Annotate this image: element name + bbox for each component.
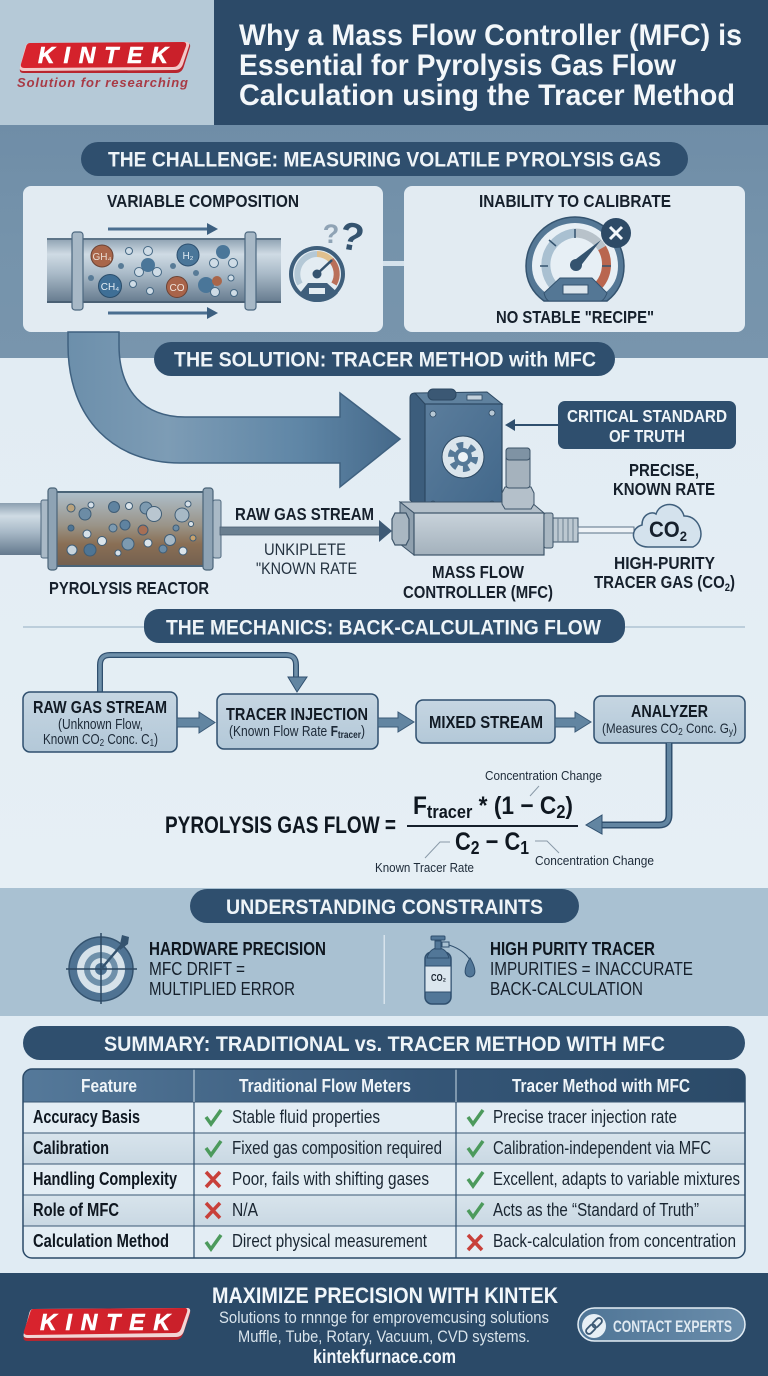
heading: the solution: [154, 342, 615, 376]
logo: Kintek: KINTEK: [38, 42, 169, 68]
box: tracer injection: tracer: [338, 730, 361, 741]
heading: the mechanics: THE MECHANICS: BACK-CALCULATING FLOW: [166, 616, 602, 640]
box: raw gas stream: Known CO: [43, 732, 113, 748]
constraint: high purity tracer: HIGH PURITY TRACER: [490, 938, 655, 959]
box: raw gas stream: Conc. C: [104, 732, 150, 748]
formula: [165, 792, 578, 858]
constraint: high purity tracer: [425, 936, 693, 1004]
label: high-purity tracer gas: [594, 553, 735, 594]
box: raw gas stream: ): [154, 732, 158, 748]
formula: 1: [520, 838, 529, 858]
icon: pipe with gas molecules: [47, 223, 281, 319]
label: mass flow controller: [403, 562, 553, 602]
box: analyzer: 2: [678, 727, 683, 738]
heading: understanding constraints: UNDERSTANDING CONSTRAINTS: [226, 895, 543, 919]
icon: gas cylinder with drop: [425, 936, 475, 1004]
label: mass flow controller: MASS FLOW: [432, 562, 524, 582]
table header: Tracer Method with MFC: [512, 1076, 690, 1096]
arrow: raw gas stream: [220, 504, 392, 578]
box: tracer injection: ): [361, 724, 365, 740]
callout: critical standard of truth: CRITICAL STANDARD: [567, 406, 727, 426]
formula: F: [413, 792, 428, 820]
heading: the challenge: [81, 142, 688, 176]
box: tracer injection: (Known Flow Rate F: [229, 724, 347, 740]
heading: the mechanics: [144, 609, 625, 643]
constraint: hardware precision: MULTIPLIED ERROR: [149, 978, 295, 999]
footer: [0, 1273, 768, 1376]
title: Calculation using the Tracer Method: [239, 79, 735, 112]
constraint: high purity tracer: IMPURITIES = INACCURATE: [490, 958, 693, 979]
tracer gas line and CO2 cloud: 2: [680, 528, 687, 544]
label: precise known rate: KNOWN RATE: [613, 479, 715, 499]
formula: tracer: [427, 802, 472, 822]
row: accuracy basis: Accuracy Basis: [33, 1107, 140, 1127]
pyrolysis reactor: PYROLYSIS REACTOR: [49, 578, 209, 598]
row: calibration: Calibration: [33, 1138, 109, 1158]
logo: footer Kintek: [24, 1308, 190, 1341]
arrow: to analyzer: [555, 712, 591, 732]
box: analyzer: y: [729, 727, 733, 738]
icon: pipe with gas molecules: H₂: [182, 251, 194, 262]
row: accuracy basis: Stable fluid properties: [232, 1107, 380, 1127]
formula: PYROLYSIS GAS FLOW =: [165, 812, 396, 839]
panel: inability to calibrate: NO STABLE "RECIPE": [496, 307, 654, 327]
divider: [23, 626, 745, 628]
icon: pipe with gas molecules: CH₄: [101, 282, 119, 293]
row: calibration: [33, 1138, 711, 1158]
heading: understanding constraints: [190, 889, 579, 923]
box: raw gas stream: 2: [100, 738, 104, 749]
formula: 2: [556, 802, 565, 822]
box: raw gas stream: [23, 692, 177, 752]
box: tracer injection: [217, 694, 378, 749]
button: contact experts: [578, 1308, 745, 1341]
formula: ): [565, 792, 573, 820]
title: Essential for Pyrolysis Gas Flow: [239, 49, 677, 82]
formula: * (1 − C: [472, 792, 556, 820]
row: calibration: Calibration-independent via MFC: [493, 1138, 711, 1158]
arrow: to tracer injection: [177, 712, 215, 733]
heading: summary: [23, 1026, 745, 1060]
footer text: MAXIMIZE PRECISION WITH KINTEK: [212, 1283, 559, 1308]
icon: large gauge with x badge: [526, 217, 631, 301]
title: Why a Mass Flow Controller (MFC) is: [239, 19, 742, 52]
box: mixed stream: MIXED STREAM: [429, 712, 543, 732]
heading: the challenge: THE CHALLENGE: MEASURING VOLATILE PYROLYSIS GAS: [108, 148, 661, 172]
icon: small gauge with question marks: ?: [336, 214, 367, 261]
constraint: hardware precision: HARDWARE PRECISION: [149, 938, 326, 959]
formula: C: [455, 828, 473, 856]
icon: gas cylinder with drop: CO₂: [431, 973, 446, 984]
icon: target with dart: [66, 933, 137, 1004]
callout: critical standard of truth: [505, 401, 736, 449]
row: calculation method: Calculation Method: [33, 1231, 169, 1251]
box: tracer injection: TRACER INJECTION: [226, 704, 368, 724]
icon: small gauge with question marks: ?: [323, 219, 339, 249]
panel: inability to calibrate: [404, 186, 745, 332]
formula annotations: Known Tracer Rate: [375, 860, 474, 875]
label: precise known rate: [613, 460, 715, 499]
table header: Feature: [81, 1076, 137, 1096]
formula annotations: Concentration Change: [485, 768, 602, 783]
divider: [384, 935, 385, 1004]
label: high-purity tracer gas: ): [730, 572, 735, 592]
formula annotations: Concentration Change: [535, 853, 654, 868]
label: high-purity tracer gas: HIGH-PURITY: [614, 553, 715, 573]
tracer gas line and CO2 cloud: CO: [649, 517, 682, 542]
arrow: raw gas to tracer injection: [100, 655, 307, 692]
footer text: Muffle, Tube, Rotary, Vacuum, CVD systems.: [238, 1328, 530, 1346]
icon: pipe with gas molecules: GH₄: [92, 252, 112, 263]
arrow: raw gas stream: "KNOWN RATE: [256, 559, 357, 578]
panel: variable composition: VARIABLE COMPOSITION: [107, 191, 299, 211]
pyrolysis reactor: [0, 488, 221, 598]
row: calculation method: [33, 1231, 736, 1251]
flow diagram: [23, 655, 745, 834]
box: analyzer: ): [733, 720, 737, 736]
arrow: raw gas stream: RAW GAS STREAM: [235, 504, 374, 524]
row: calibration: Fixed gas composition required: [232, 1138, 442, 1158]
footer text: [212, 1283, 559, 1368]
arrow: big curved arrow to MFC: [68, 332, 400, 487]
logo: Kintek: Solution for researching: [17, 75, 188, 90]
panel: variable composition: [23, 186, 383, 332]
logo: footer Kintek: KINTEK: [40, 1309, 171, 1335]
box: analyzer: (Measures CO: [602, 720, 693, 736]
row: role of mfc: [33, 1200, 699, 1220]
row: accuracy basis: [33, 1107, 677, 1127]
constraint: high purity tracer: BACK-CALCULATION: [490, 978, 643, 999]
box: mixed stream: [416, 700, 555, 743]
row: accuracy basis: Precise tracer injection rate: [493, 1107, 677, 1127]
constraint: hardware precision: [66, 933, 326, 1004]
icon: pipe with gas molecules: CO: [170, 283, 185, 294]
label: high-purity tracer gas: 2: [725, 582, 730, 594]
box: analyzer: [594, 696, 745, 743]
row: role of mfc: Role of MFC: [33, 1200, 119, 1220]
panel: inability to calibrate: INABILITY TO CALIBRATE: [479, 191, 671, 211]
row: handling complexity: [33, 1169, 740, 1189]
footer text: Solutions to rnnnge for emprovemcusing solutions: [219, 1309, 549, 1327]
constraint: hardware precision: MFC DRIFT =: [149, 958, 245, 979]
icon: small gauge with question marks: [289, 214, 367, 302]
formula: 2: [471, 838, 480, 858]
header: [0, 0, 768, 125]
arrow: analyzer to formula: [586, 743, 669, 834]
row: handling complexity: Poor, fails with shifting gases: [232, 1169, 429, 1189]
table: comparison: [23, 1069, 745, 1258]
label: mass flow controller: CONTROLLER (MFC): [403, 582, 553, 602]
arrow: raw gas stream: UNKIPLETE: [264, 540, 346, 559]
footer text: kintekfurnace.com: [313, 1347, 456, 1368]
connector between challenge panels: [383, 261, 404, 266]
formula annotations: [375, 768, 654, 875]
title: [239, 19, 742, 112]
label: high-purity tracer gas: TRACER GAS (CO: [594, 572, 747, 592]
box: analyzer: ANALYZER: [631, 701, 708, 721]
row: calculation method: Direct physical measurement: [232, 1231, 427, 1251]
logo: Kintek: [17, 42, 190, 90]
callout: critical standard of truth: OF TRUTH: [609, 426, 685, 446]
tracer gas line and CO2 cloud: [578, 504, 701, 547]
box: raw gas stream: 1: [150, 738, 154, 749]
heading: summary: SUMMARY: TRADITIONAL vs. TRACER METHOD WITH MFC: [104, 1032, 665, 1056]
heading: the solution: THE SOLUTION: TRACER METHOD with MFC: [174, 348, 596, 372]
arrow: to mixed stream: [378, 712, 414, 732]
table header: [81, 1076, 690, 1096]
row: role of mfc: Acts as the “Standard of Truth”: [493, 1200, 699, 1220]
table header: Traditional Flow Meters: [239, 1076, 411, 1096]
row: role of mfc: N/A: [232, 1200, 258, 1220]
box: raw gas stream: RAW GAS STREAM: [33, 697, 167, 717]
icon: mass flow controller: [392, 389, 578, 555]
formula: − C: [480, 828, 520, 856]
box: raw gas stream: (Unknown Flow,: [58, 717, 143, 733]
box: analyzer: Conc. G: [683, 720, 729, 736]
label: precise known rate: PRECISE,: [629, 460, 699, 480]
row: handling complexity: Handling Complexity: [33, 1169, 177, 1189]
